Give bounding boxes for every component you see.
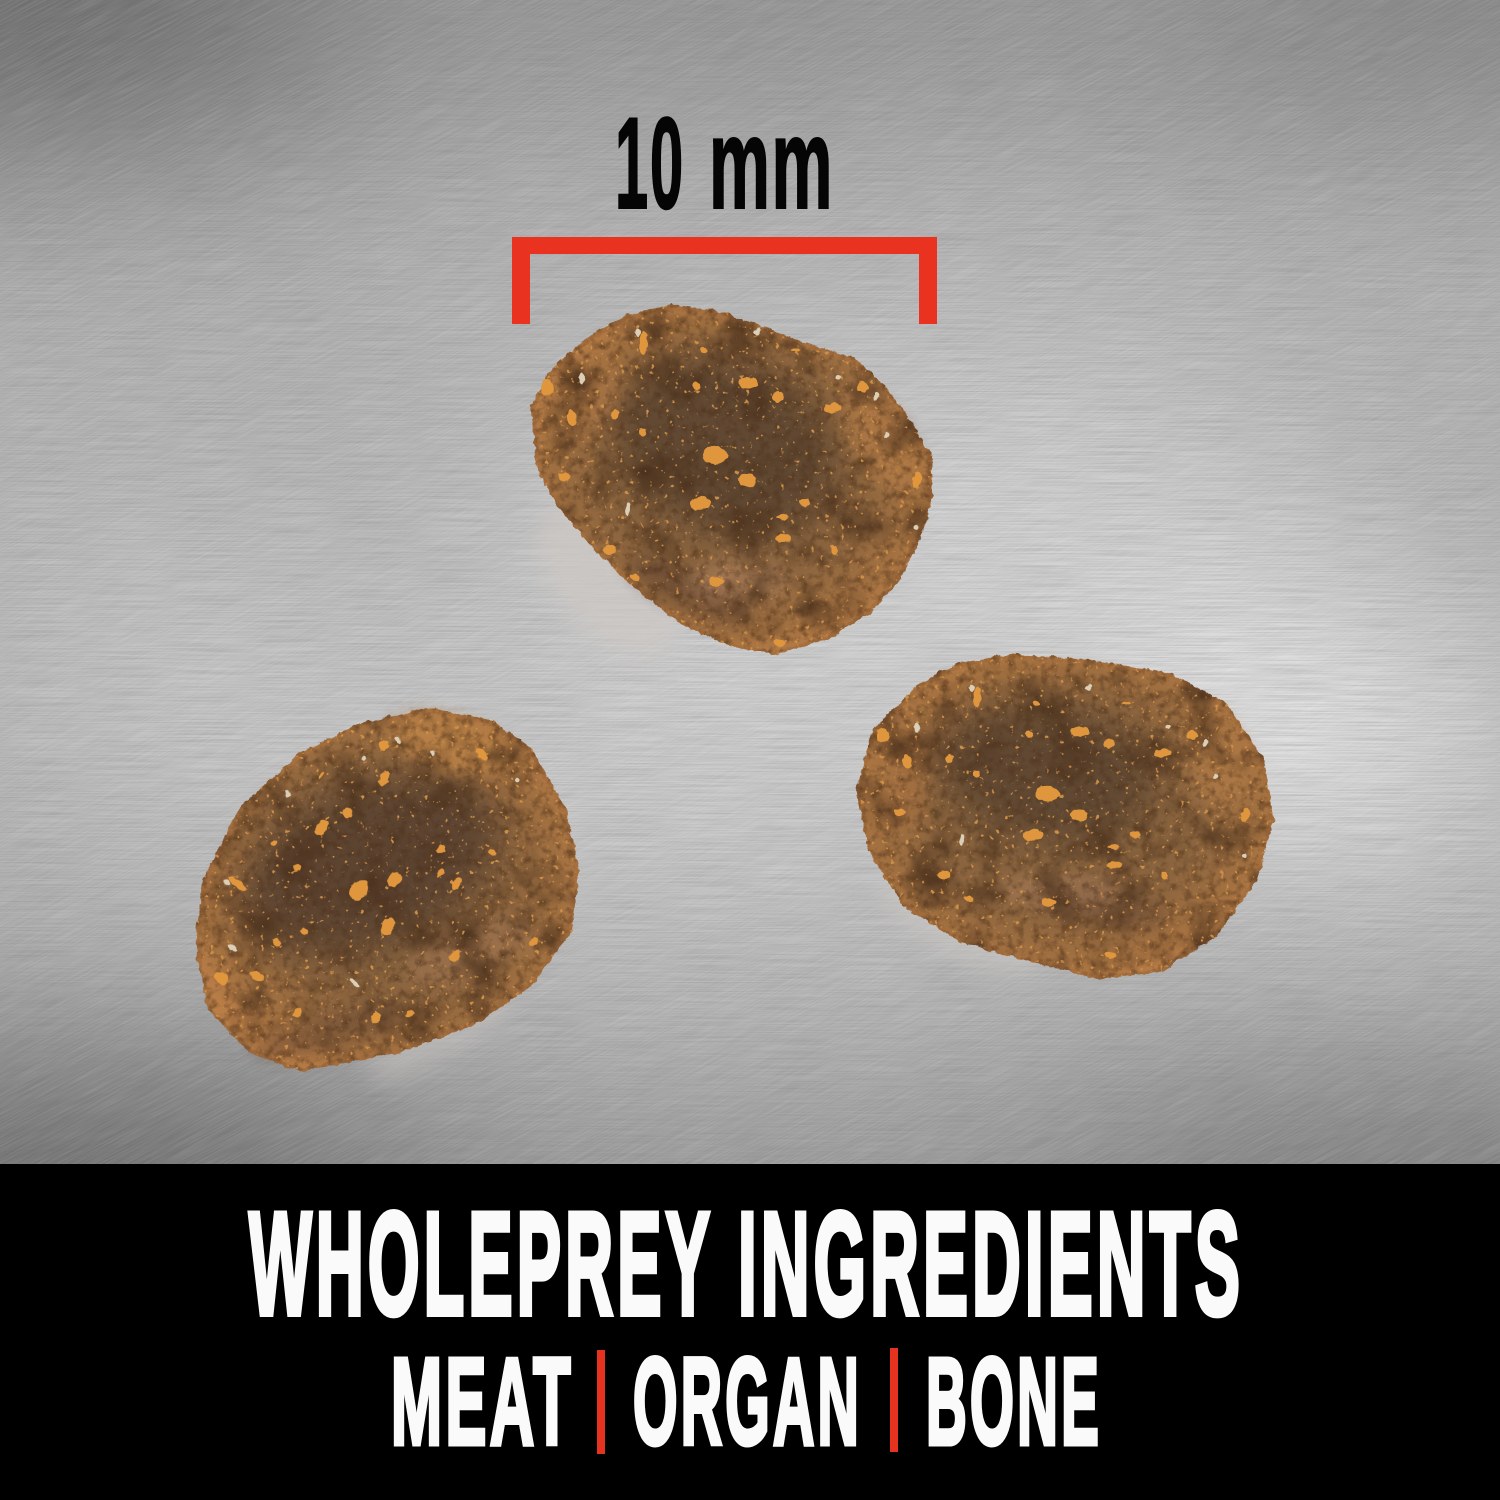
- panel: black footer banner: MEAT: [391, 1334, 574, 1471]
- panel: black footer banner: ORGAN: [633, 1334, 862, 1471]
- title: 10 mm measurement: 10: [615, 90, 685, 236]
- icon: red measurement bracket: [512, 237, 937, 324]
- divider: second red bar: [890, 1348, 898, 1452]
- icon: bottom-right kibble: [858, 656, 1272, 977]
- kibble shadow: left: [355, 973, 525, 1097]
- divider: first red bar: [597, 1350, 605, 1454]
- heading: wholeprey ingredients: WHOLEPREY: [249, 1182, 714, 1345]
- panel: black footer banner: [0, 1164, 1500, 1500]
- icon: top kibble: [533, 307, 932, 653]
- icon: bottom-left kibble: [173, 670, 610, 1120]
- panel: black footer banner: BONE: [926, 1334, 1102, 1471]
- title: 10 mm measurement: [615, 90, 834, 236]
- kibble shadow: top: [508, 475, 708, 681]
- title: 10 mm measurement: mm: [709, 90, 834, 236]
- kibble shadow: right: [866, 860, 1054, 990]
